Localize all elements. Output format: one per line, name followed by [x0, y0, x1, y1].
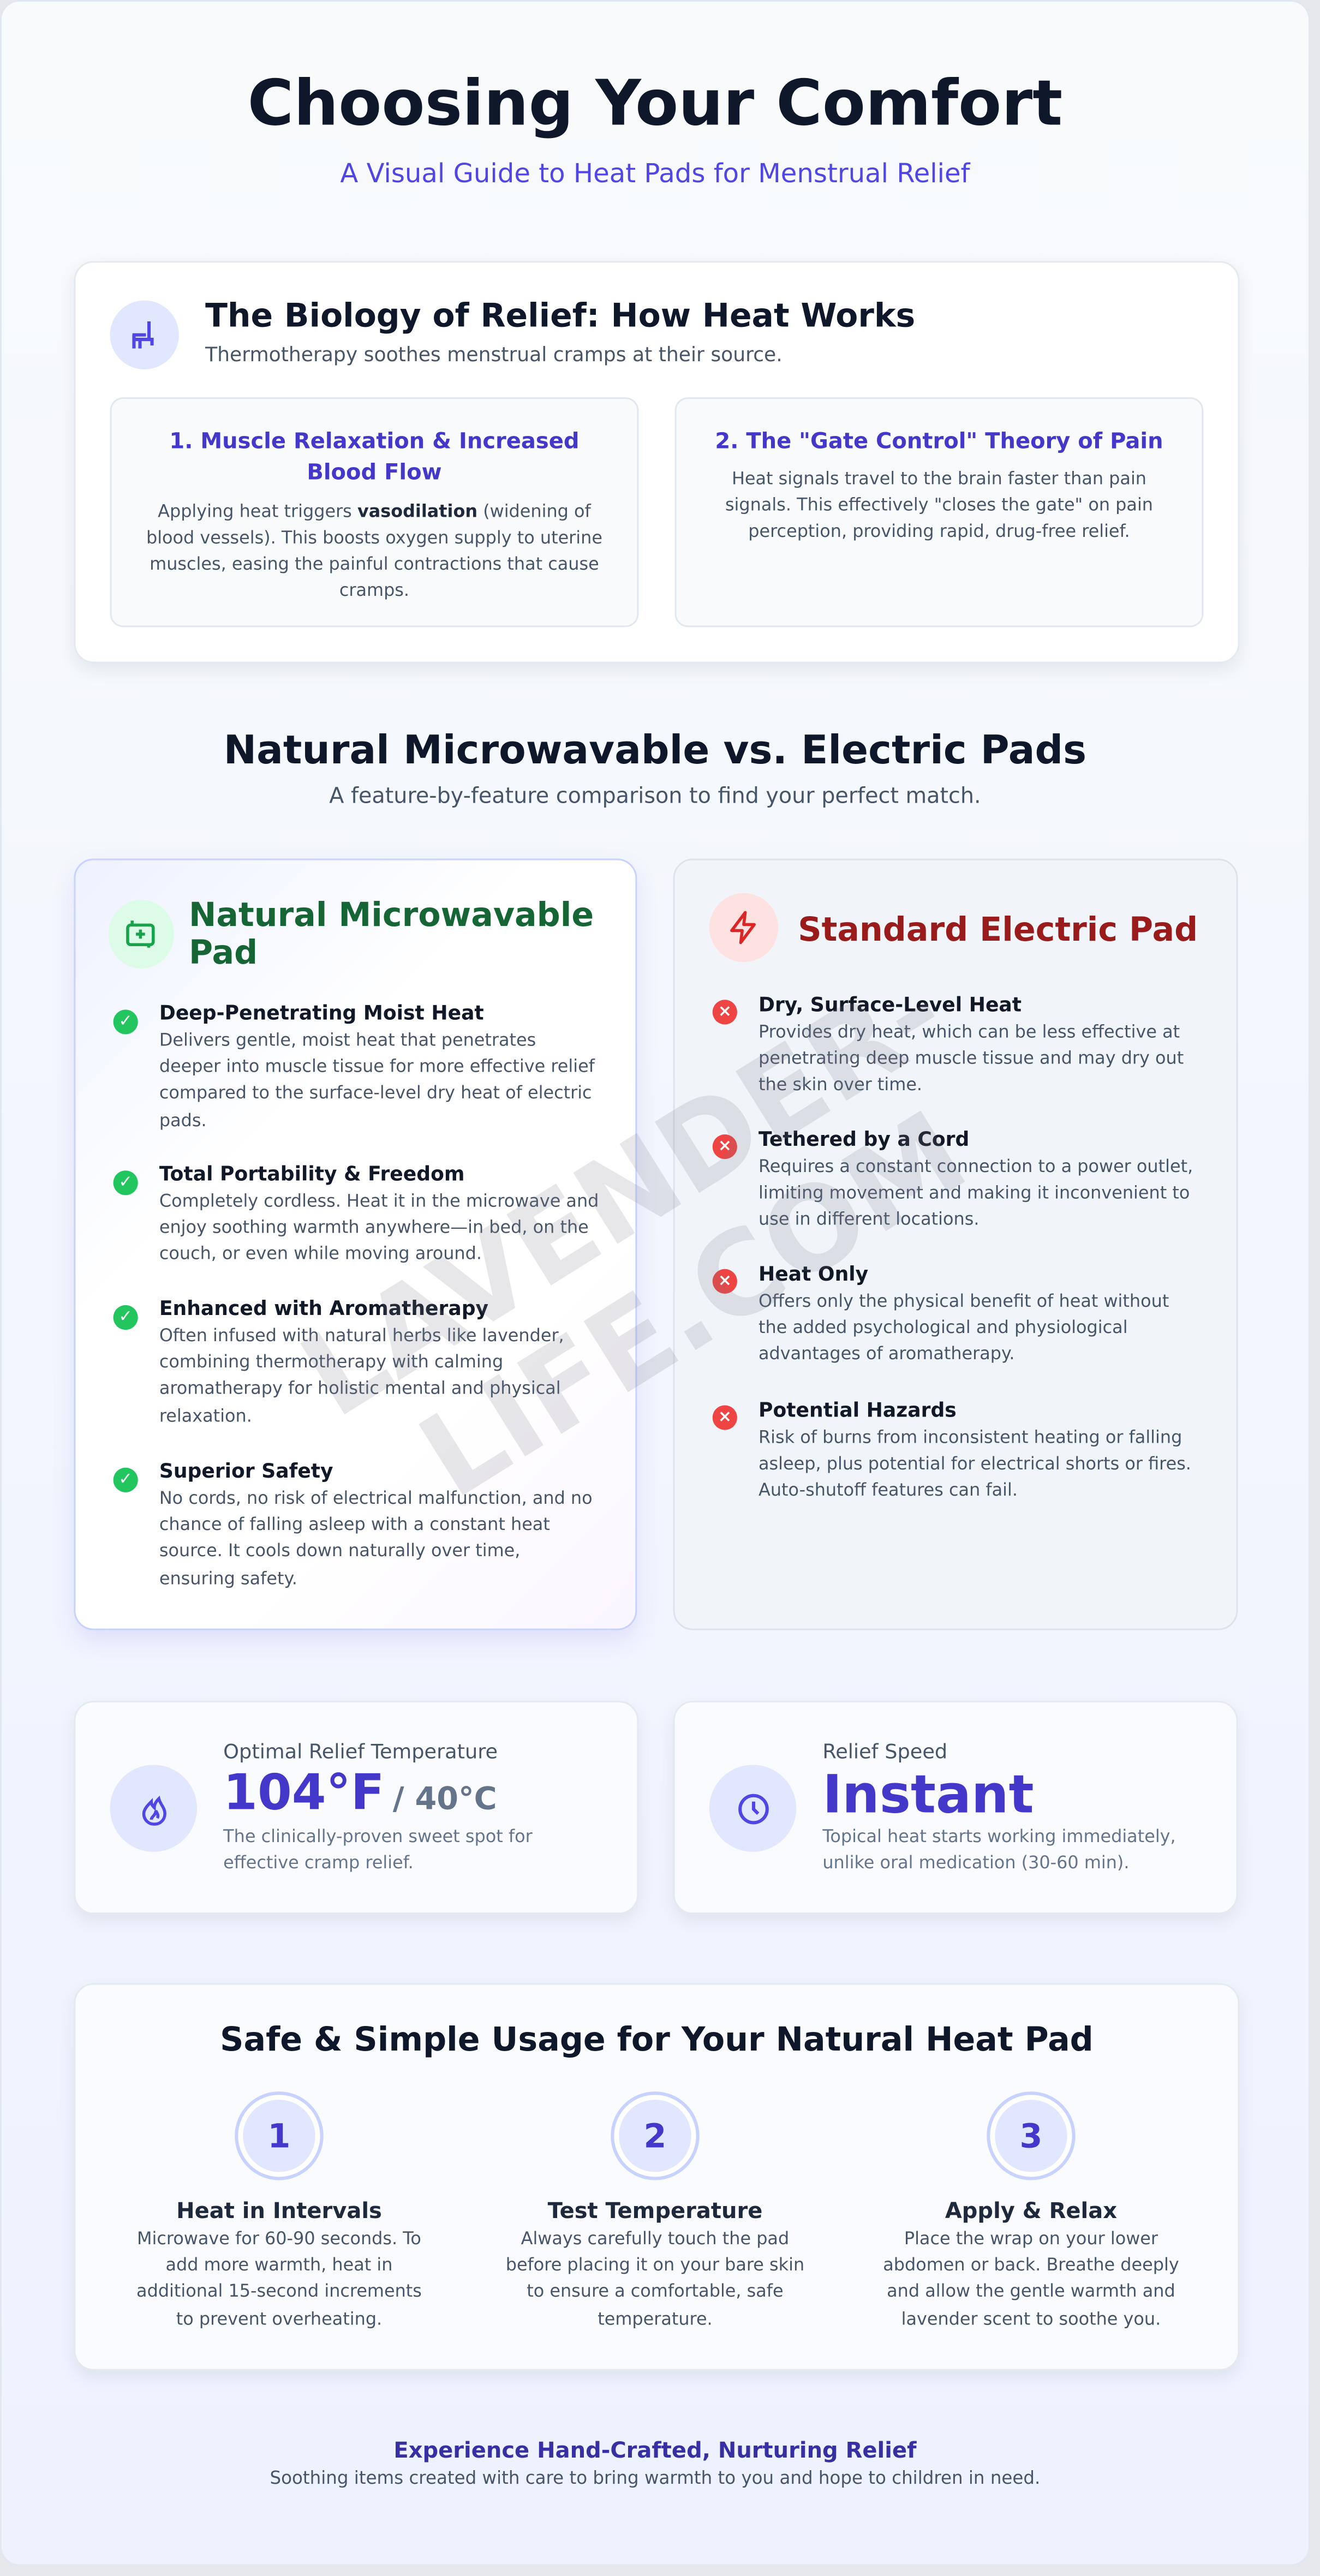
description: effective cramp relief. — [223, 1854, 414, 1874]
label: Optimal Relief Temperature — [223, 1740, 498, 1763]
watermark: LIFE.COM — [397, 1085, 989, 1525]
heading: The Biology of Relief: How Heat Works — [205, 297, 915, 335]
item: portability: ✓ — [119, 1174, 133, 1192]
step 1: Heat in Intervals — [176, 2200, 382, 2225]
subheading: Thermotherapy soothes menstrual cramps at their source. — [205, 343, 783, 366]
item: dry heat: the skin over time. — [758, 1076, 922, 1096]
icon: flame — [110, 1765, 197, 1852]
step 2 — [506, 2091, 804, 2329]
step 3: lavender scent to soothe you. — [901, 2309, 1161, 2329]
item: hazards: × — [718, 1408, 732, 1427]
heading: Standard Electric Pad — [798, 910, 1198, 949]
item: moist heat: Delivers gentle, moist heat that penetrates — [159, 1031, 536, 1051]
box: gate control: Heat signals travel to the brain faster than pain — [732, 469, 1146, 489]
step 2: to ensure a comfortable, safe — [527, 2282, 784, 2302]
item: cord: × — [718, 1138, 732, 1156]
step 2: Always carefully touch the pad — [521, 2230, 789, 2249]
item: hazards — [713, 1398, 1191, 1501]
footer: Soothing items created with care to bring warmth to you and hope to children in need. — [270, 2467, 1040, 2489]
step 2: Test Temperature — [548, 2200, 762, 2225]
step 3: Place the wrap on your lower — [904, 2230, 1158, 2249]
heading — [189, 895, 594, 972]
item: aromatherapy: Often infused with natural herbs like lavender, — [159, 1326, 564, 1346]
stat card: temperature — [74, 1701, 638, 1914]
step 1 — [136, 2091, 422, 2329]
item: heat only — [713, 1263, 1169, 1365]
item: safety: ✓ — [119, 1471, 133, 1489]
item: moist heat: ✓ — [119, 1013, 133, 1031]
title: Choosing Your Comfort — [248, 67, 1062, 141]
panel: biology of relief — [74, 261, 1240, 664]
section subheading: A feature-by-feature comparison to find your perfect match. — [329, 785, 981, 809]
step 3 — [883, 2091, 1179, 2329]
description: unlike oral medication (30-60 min). — [822, 1854, 1130, 1874]
item: portability: Completely cordless. Heat it in the microwave and — [159, 1192, 599, 1211]
box: muscle relaxation: cramps. — [339, 581, 409, 601]
item: aromatherapy: relaxation. — [159, 1406, 252, 1426]
item: cord: Requires a constant connection to a power outlet, — [758, 1157, 1193, 1177]
value: 104°F / 40°C — [223, 1765, 497, 1822]
description — [822, 1827, 1176, 1874]
box: gate control — [675, 397, 1203, 627]
description: The clinically-proven sweet spot for — [223, 1827, 533, 1847]
item: safety: chance of falling asleep with a constant heat — [159, 1516, 550, 1535]
item: dry heat: × — [718, 1003, 732, 1021]
watermark: LAVENDER- — [279, 943, 968, 1444]
item: moist heat: compared to the surface-level dry heat of electric — [159, 1084, 592, 1104]
step 2: 2 — [644, 2116, 666, 2155]
item: safety — [114, 1460, 593, 1588]
item: dry heat: Provides dry heat, which can be less effective at — [758, 1023, 1180, 1043]
description: Topical heat starts working immediately, — [822, 1827, 1176, 1847]
box: muscle relaxation: blood vessels). This boosts oxygen supply to uterine — [146, 529, 602, 548]
box: muscle relaxation: Blood Flow — [307, 461, 442, 486]
step 1: 1 — [268, 2116, 290, 2155]
panel: standard electric pad — [673, 859, 1238, 1630]
item: heat only: Heat Only — [758, 1263, 868, 1286]
icon: clock — [709, 1765, 796, 1852]
heading: Pad — [189, 933, 258, 972]
section heading: comparison: Natural Microwavable vs. Electric Pads — [224, 727, 1086, 773]
step 2: temperature. — [598, 2309, 713, 2329]
item: cord — [713, 1128, 1193, 1230]
step 3: Apply & Relax — [945, 2200, 1117, 2225]
box: muscle relaxation: 1. Muscle Relaxation & Increased — [169, 430, 580, 455]
item: hazards: Auto-shutoff features can fail. — [758, 1481, 1018, 1501]
box: muscle relaxation — [110, 397, 638, 627]
footer: Experience Hand-Crafted, Nurturing Relief — [393, 2440, 917, 2464]
item: heat only: × — [718, 1272, 732, 1290]
item: cord: use in different locations. — [758, 1211, 979, 1230]
icon: heat pad — [110, 301, 179, 369]
icon: microwave pad — [109, 900, 174, 969]
item: portability: Total Portability & Freedom — [159, 1162, 465, 1185]
step 1: add more warmth, heat in — [165, 2256, 393, 2276]
heading: Safe & Simple Usage for Your Natural Heat Pad — [220, 2019, 1094, 2059]
box: muscle relaxation: muscles, easing the painful contractions that cause — [150, 555, 599, 575]
box: gate control: 2. The "Gate Control" Theory of Pain — [715, 430, 1163, 455]
item: hazards: Potential Hazards — [758, 1398, 957, 1422]
item: aromatherapy: Enhanced with Aromatherapy — [159, 1297, 488, 1320]
item: cord: limiting movement and making it inconvenient to — [758, 1184, 1190, 1204]
item: safety: source. It cools down naturally over time, — [159, 1542, 520, 1562]
item: moist heat: pads. — [159, 1111, 207, 1131]
heading: Natural Microwavable — [189, 895, 594, 934]
item: portability: enjoy soothing warmth anywhere—in bed, on the — [159, 1218, 589, 1238]
item: moist heat: Deep-Penetrating Moist Heat — [159, 1001, 484, 1024]
panel: usage steps — [74, 1983, 1240, 2371]
step 3: 3 — [1019, 2116, 1042, 2155]
item: heat only: the added psychological and physiological — [758, 1319, 1128, 1338]
item: dry heat: penetrating deep muscle tissue and may dry out — [758, 1049, 1184, 1069]
item: safety: No cords, no risk of electrical malfunction, and no — [159, 1489, 593, 1509]
step 1: to prevent overheating. — [176, 2309, 382, 2329]
box: gate control: perception, providing rapid, drug-free relief. — [748, 522, 1130, 542]
item: portability — [114, 1162, 599, 1265]
item: aromatherapy: aromatherapy for holistic mental and physical — [159, 1380, 561, 1400]
value: Instant — [822, 1763, 1034, 1826]
box: gate control: signals. This effectively "closes the gate" on pain — [725, 496, 1153, 516]
icon: lightning — [709, 893, 778, 962]
item: hazards: Risk of burns from inconsistent heating or falling — [758, 1429, 1182, 1448]
item: safety: ensuring safety. — [159, 1569, 297, 1588]
step 3: and allow the gentle warmth and — [887, 2282, 1175, 2302]
description — [223, 1827, 533, 1874]
box: muscle relaxation: Applying heat triggers vasodilation (widening of — [158, 503, 591, 522]
item: aromatherapy: ✓ — [119, 1308, 133, 1326]
item: dry heat: Dry, Surface-Level Heat — [758, 993, 1022, 1016]
item: aromatherapy — [114, 1297, 564, 1426]
panel: natural microwavable pad — [74, 859, 637, 1630]
subtitle: A Visual Guide to Heat Pads for Menstrual Relief — [340, 158, 970, 189]
step 1: Microwave for 60-90 seconds. To — [137, 2230, 421, 2249]
step 3: abdomen or back. Breathe deeply — [883, 2256, 1179, 2276]
item: moist heat: deeper into muscle tissue for more effective relief — [159, 1057, 595, 1077]
item: portability: couch, or even while moving around. — [159, 1245, 482, 1265]
footer — [270, 2440, 1040, 2489]
item: aromatherapy: combining thermotherapy with calming — [159, 1353, 503, 1373]
step 1: additional 15-second increments — [136, 2282, 422, 2302]
label: Relief Speed — [822, 1740, 947, 1763]
item: moist heat — [114, 1001, 595, 1131]
step 2: before placing it on your bare skin — [506, 2256, 804, 2276]
stat card: relief speed — [673, 1701, 1238, 1914]
item: safety: Superior Safety — [159, 1460, 333, 1483]
item: dry heat — [713, 993, 1184, 1096]
item: heat only: advantages of aromatherapy. — [758, 1345, 1015, 1365]
item: heat only: Offers only the physical benefit of heat without — [758, 1292, 1169, 1312]
item: hazards: asleep, plus potential for electrical shorts or fires. — [758, 1455, 1191, 1474]
item: cord: Tethered by a Cord — [758, 1128, 969, 1151]
